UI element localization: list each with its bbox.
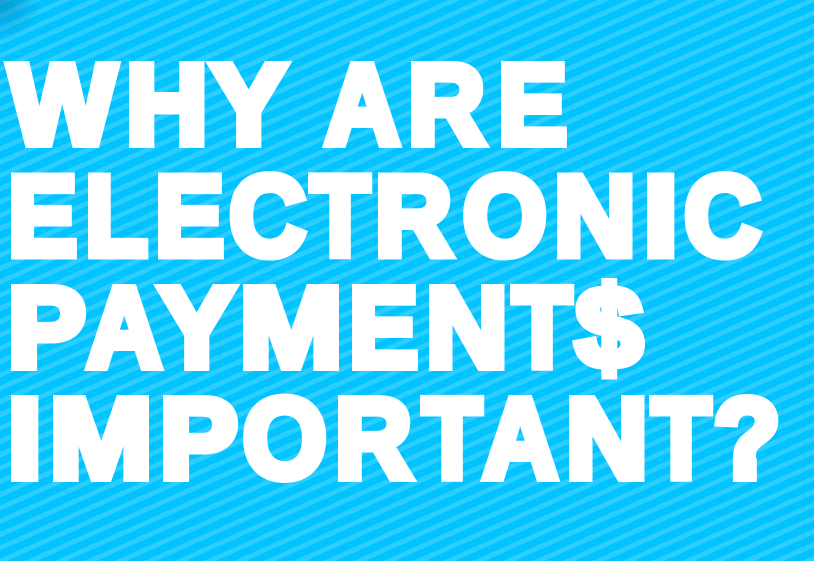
title line: PAYMENT$: P — [8, 265, 86, 391]
title line: WHY ARE: H — [126, 42, 208, 168]
title — [8, 41, 780, 502]
title line: PAYMENT$: E — [349, 264, 418, 391]
title line: ELECTRONIC: N — [554, 153, 636, 279]
title line: IMPORTANT?: T — [652, 376, 710, 502]
title line: IMPORTANT?: T — [423, 376, 481, 502]
title line: ELECTRONIC: E — [8, 152, 77, 279]
title line: WHY ARE: W — [9, 42, 116, 168]
title line: ELECTRONIC: L — [85, 153, 147, 279]
title line: PAYMENT$: M — [240, 265, 342, 391]
title line: WHY ARE: Y — [211, 42, 286, 168]
title line: IMPORTANT?: M — [50, 376, 152, 502]
title line: ELECTRONIC: T — [311, 154, 369, 280]
title line: IMPORTANT?: R — [335, 377, 412, 502]
title line: WHY ARE: E — [498, 41, 567, 168]
title line: WHY ARE — [9, 41, 567, 168]
title line: IMPORTANT?: N — [566, 376, 648, 502]
title line: PAYMENT$: N — [426, 264, 508, 390]
title line: WHY ARE: R — [408, 43, 485, 168]
title line: IMPORTANT?: O — [243, 376, 327, 502]
title line: ELECTRONIC: I — [644, 153, 678, 279]
title line: IMPORTANT?: I — [8, 376, 42, 502]
title line: IMPORTANT? — [8, 375, 780, 502]
title line: IMPORTANT?: ? — [714, 377, 780, 502]
title line: PAYMENT$: Y — [159, 264, 234, 390]
title line: IMPORTANT?: A — [483, 375, 557, 502]
title line: ELECTRONIC: C — [230, 154, 305, 280]
title line: PAYMENT$ — [8, 264, 642, 391]
title line: ELECTRONIC: C — [685, 154, 760, 280]
title line: PAYMENT$: T — [513, 265, 571, 391]
title line: ELECTRONIC: E — [155, 152, 224, 279]
title line: PAYMENT$: A — [87, 264, 161, 391]
title line: ELECTRONIC — [8, 152, 760, 280]
title line: IMPORTANT?: P — [160, 376, 238, 502]
title line: ELECTRONIC: O — [463, 153, 547, 280]
title line: WHY ARE: A — [325, 41, 399, 168]
title line: ELECTRONIC: R — [375, 154, 452, 280]
title line: PAYMENT$: $ — [576, 264, 642, 391]
